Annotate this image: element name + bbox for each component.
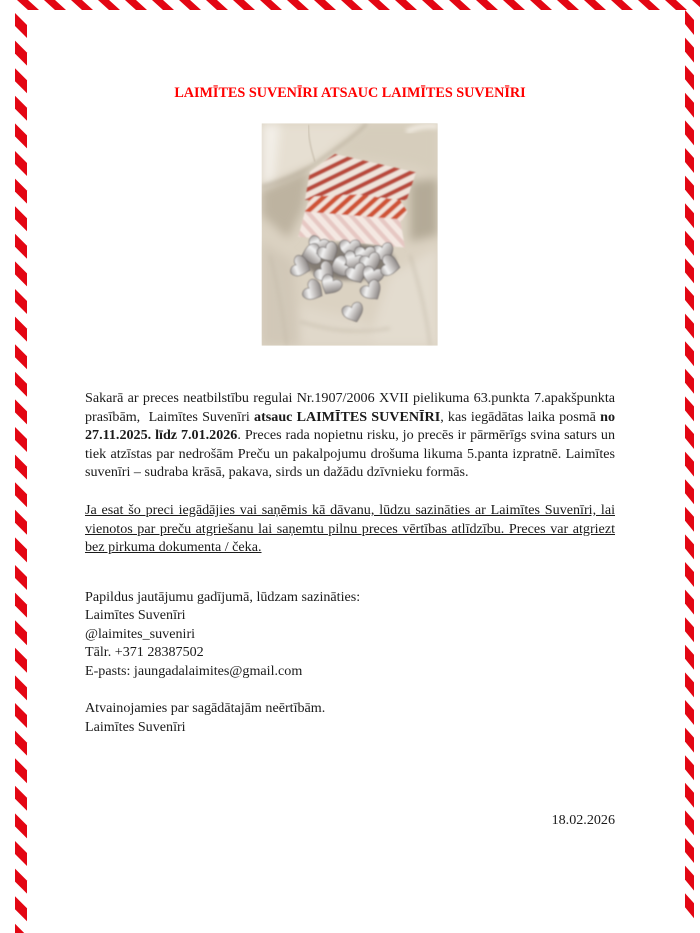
contact details: @laimites_suveniri (85, 626, 195, 642)
contact details: Tālr. +371 28387502 (85, 644, 204, 660)
recall notice paragraph: 27.11.2025. līdz 7.01.2026. Preces rada nopietnu risku, jo precēs ir pārmērīgs svina saturs un (85, 427, 615, 443)
recall notice paragraph: prasībām, Laimītes Suvenīri atsauc LAIMĪTES SUVENĪRI, kas iegādātas laika posmā no (85, 409, 615, 425)
recall notice paragraph: tiek atzīstas par nedrošām Preču un pakalpojumu drošuma likuma 5.panta izpratnē. Laimītes (85, 446, 615, 462)
underlined return instructions: vienotos par preču atgriešanu lai saņemtu pilnu preces vērtības atlīdzību. Preces var atgriezt (85, 521, 615, 537)
photo: striped pouch with silver hearts on linen (262, 123, 438, 346)
apology and signature: Atvainojamies par sagādātajām neērtībām. (85, 700, 325, 716)
underlined return instructions: bez pirkuma dokumenta / čeka. (85, 539, 262, 555)
underlined return instructions (85, 502, 615, 555)
title: LAIMĪTES SUVENĪRI ATSAUC LAIMĪTES SUVENĪRI (174, 85, 526, 101)
apology and signature (85, 700, 325, 735)
recall notice paragraph: Sakarā ar preces neatbilstību regulai Nr.1907/2006 XVII pielikuma 63.punkta 7.apakšpunkta (85, 390, 615, 406)
contact details: Laimītes Suvenīri (85, 607, 186, 623)
contact details: E-pasts: jaungadalaimites@gmail.com (85, 663, 302, 679)
recall notice paragraph: suvenīri – sudraba krāsā, pakava, sirds un dažādu dzīvnieku formās. (85, 464, 469, 480)
recall notice paragraph (85, 390, 615, 480)
date: 18.02.2026 (552, 812, 615, 828)
apology and signature: Laimītes Suvenīri (85, 719, 186, 735)
shadow under the hearts (305, 243, 395, 280)
underlined return instructions: Ja esat šo preci iegādājies vai saņēmis kā dāvanu, lūdzu sazināties ar Laimītes Suvenīri, lai (85, 502, 615, 518)
contact details (85, 589, 360, 679)
contact details: Papildus jautājumu gadījumā, lūdzam sazināties: (85, 589, 360, 605)
